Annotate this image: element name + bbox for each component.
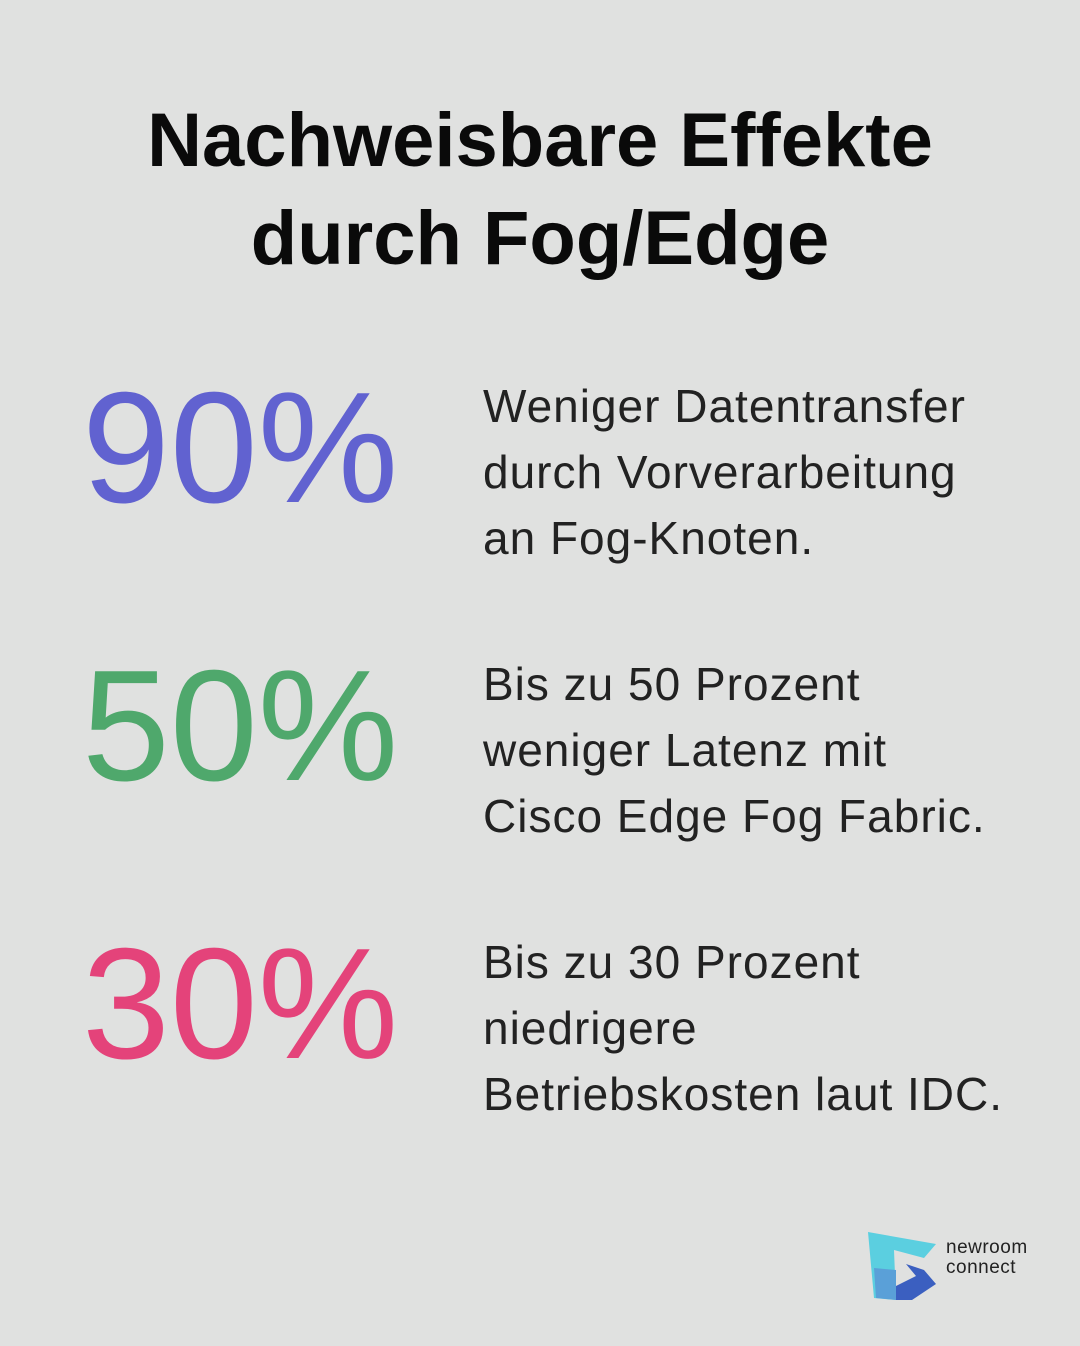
title: durch Fog/Edge [251, 196, 829, 281]
stat 2 text: Cisco Edge Fog Fabric. [483, 790, 986, 842]
stat 1 number: 90% [82, 360, 398, 536]
stat 3 text: Bis zu 30 Prozent [483, 936, 861, 988]
title: Nachweisbare Effekte [147, 98, 933, 183]
stat 3 text: niedrigere [483, 1002, 698, 1054]
stat 1 text: an Fog-Knoten. [483, 512, 814, 564]
stat 3 number: 30% [82, 916, 398, 1092]
stat 3 text [483, 936, 1003, 1120]
stat 2 number: 50% [82, 638, 398, 814]
stat 1 text: Weniger Datentransfer [483, 380, 966, 432]
stat 2 text: Bis zu 50 Prozent [483, 658, 861, 710]
logo: connect [946, 1257, 1016, 1278]
title [147, 98, 933, 281]
stat 3 text: Betriebskosten laut IDC. [483, 1068, 1003, 1120]
stat 2 text: weniger Latenz mit [483, 724, 887, 776]
stat 2 text [483, 658, 986, 842]
stat 1 text: durch Vorverarbeitung [483, 446, 957, 498]
logo [868, 1232, 1028, 1300]
logo: newroom [946, 1237, 1028, 1258]
stat 1 text [483, 380, 966, 564]
